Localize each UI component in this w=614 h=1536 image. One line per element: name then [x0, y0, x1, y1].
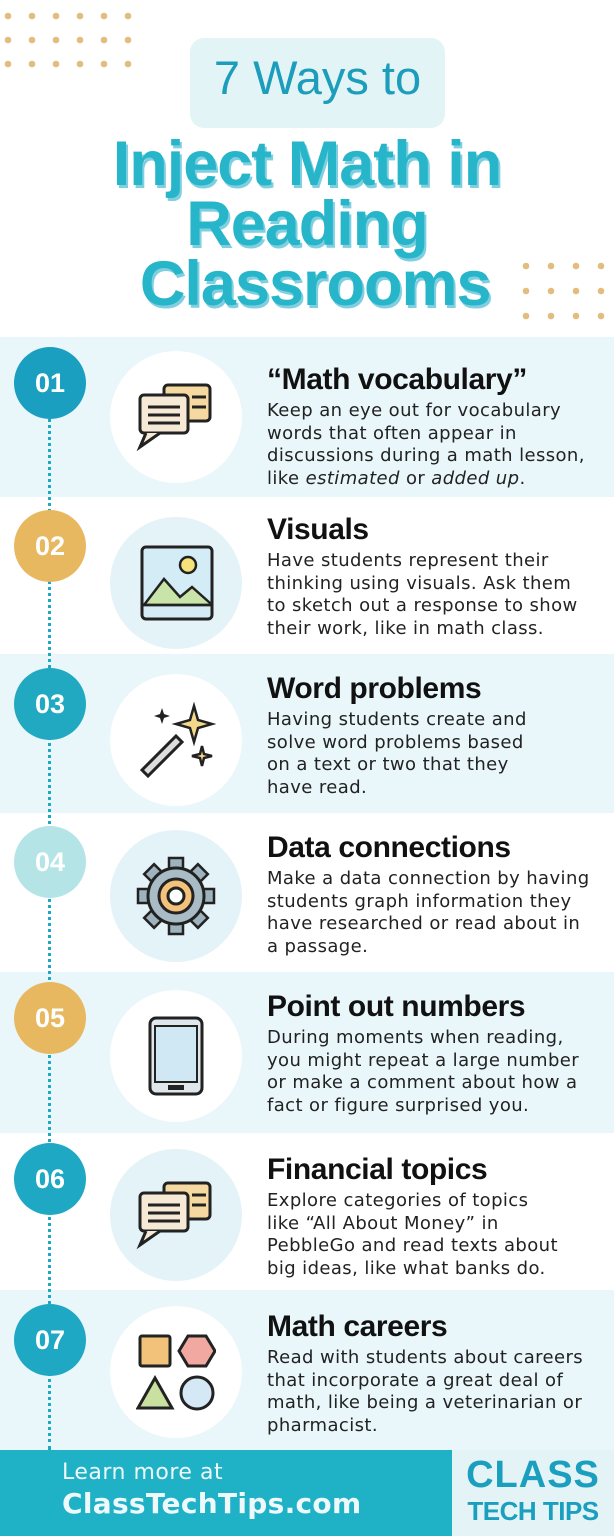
item 6 — [14, 1143, 558, 1281]
number 07 — [14, 1304, 86, 1376]
number 03 — [14, 668, 86, 740]
logo: TECH TIPS — [467, 1496, 599, 1526]
footer text — [62, 1460, 361, 1520]
text 4: a passage. — [267, 936, 368, 956]
text 6: Explore categories of topics — [267, 1190, 528, 1211]
item 4 — [14, 826, 590, 962]
icon: picture — [110, 517, 242, 649]
icon: gear — [110, 830, 242, 962]
number 02 — [14, 510, 86, 582]
text 2: thinking using visuals. Ask them — [267, 572, 571, 594]
footer text: Learn more at — [62, 1460, 223, 1485]
logo: CLASS — [466, 1454, 600, 1496]
number 02: 02 — [35, 531, 65, 561]
text 7 — [267, 1310, 583, 1436]
number 06 — [14, 1143, 86, 1215]
text 5: During moments when reading, — [267, 1027, 564, 1048]
item 1 — [14, 347, 585, 488]
text 1: Keep an eye out for vocabulary — [267, 400, 561, 421]
number 06: 06 — [35, 1164, 65, 1194]
timeline line — [48, 400, 52, 1450]
number 07: 07 — [35, 1325, 65, 1355]
text 4: Data connections — [267, 831, 511, 864]
item 5 — [14, 982, 579, 1122]
text 1: “Math vocabulary” — [267, 363, 527, 396]
text 2: Visuals — [267, 513, 369, 546]
title: Reading — [186, 189, 428, 259]
text 4: Make a data connection by having — [267, 868, 590, 889]
title: Inject Math in — [113, 129, 501, 199]
icon: shapes — [110, 1306, 242, 1438]
number 04 — [14, 826, 86, 898]
number 05 — [14, 982, 86, 1054]
text 5: you might repeat a large number — [267, 1050, 579, 1070]
text 4: have researched or read about in — [267, 913, 580, 934]
number 05: 05 — [35, 1003, 65, 1033]
number 03: 03 — [35, 689, 65, 719]
text 6: like “All About Money” in — [267, 1212, 499, 1234]
text 5: or make a comment about how a — [267, 1072, 577, 1093]
text 1: discussions during a math lesson, — [267, 445, 585, 466]
text 1: like estimated or added up. — [267, 468, 526, 488]
text 5: Point out numbers — [267, 990, 525, 1023]
text 7: Math careers — [267, 1310, 447, 1343]
text 3 — [267, 672, 527, 798]
subtitle box — [190, 38, 445, 128]
text 3: on a text or two that they — [267, 754, 509, 775]
text 4: students graph information they — [267, 890, 572, 912]
logo — [452, 1450, 614, 1536]
subtitle box: 7 Ways to — [214, 51, 421, 104]
text 2: their work, like in math class. — [267, 618, 544, 638]
text 6: PebbleGo and read texts about — [267, 1235, 558, 1256]
icon: speech bubbles — [110, 351, 242, 483]
number 01: 01 — [35, 368, 65, 398]
text 3: have read. — [267, 776, 367, 798]
footer — [0, 1450, 614, 1536]
text 1 — [267, 363, 585, 488]
text 3: Having students create and — [267, 709, 527, 730]
text 6: Financial topics — [267, 1153, 487, 1186]
item 3 — [14, 668, 527, 806]
dots right — [522, 262, 604, 320]
title: Classrooms — [140, 249, 491, 319]
text 2: Have students represent their — [267, 550, 549, 571]
text 4 — [267, 831, 590, 956]
title — [113, 129, 501, 319]
item 2 — [14, 510, 578, 649]
text 6 — [267, 1153, 558, 1278]
text 7: math, like being a veterinarian or — [267, 1392, 582, 1413]
text 1: words that often appear in — [267, 422, 517, 444]
text 6: big ideas, like what banks do. — [267, 1258, 546, 1278]
dots top-left — [4, 12, 132, 68]
item 7 — [14, 1304, 583, 1438]
number 01 — [14, 347, 86, 419]
text 7: pharmacist. — [267, 1414, 378, 1436]
text 7: Read with students about careers — [267, 1347, 583, 1368]
text 3: Word problems — [267, 672, 481, 705]
icon: magic wand — [110, 674, 242, 806]
text 5: fact or figure surprised you. — [267, 1094, 529, 1116]
icon: tablet — [110, 990, 242, 1122]
text 2: to sketch out a response to show — [267, 595, 578, 616]
text 7: that incorporate a great deal of — [267, 1370, 563, 1390]
text 3: solve word problems based — [267, 732, 524, 752]
number 04: 04 — [35, 847, 65, 877]
icon: speech bubbles — [110, 1149, 242, 1281]
footer text: ClassTechTips.com — [62, 1487, 361, 1520]
text 5 — [267, 990, 579, 1116]
bands — [0, 337, 614, 497]
text 2 — [267, 513, 578, 638]
